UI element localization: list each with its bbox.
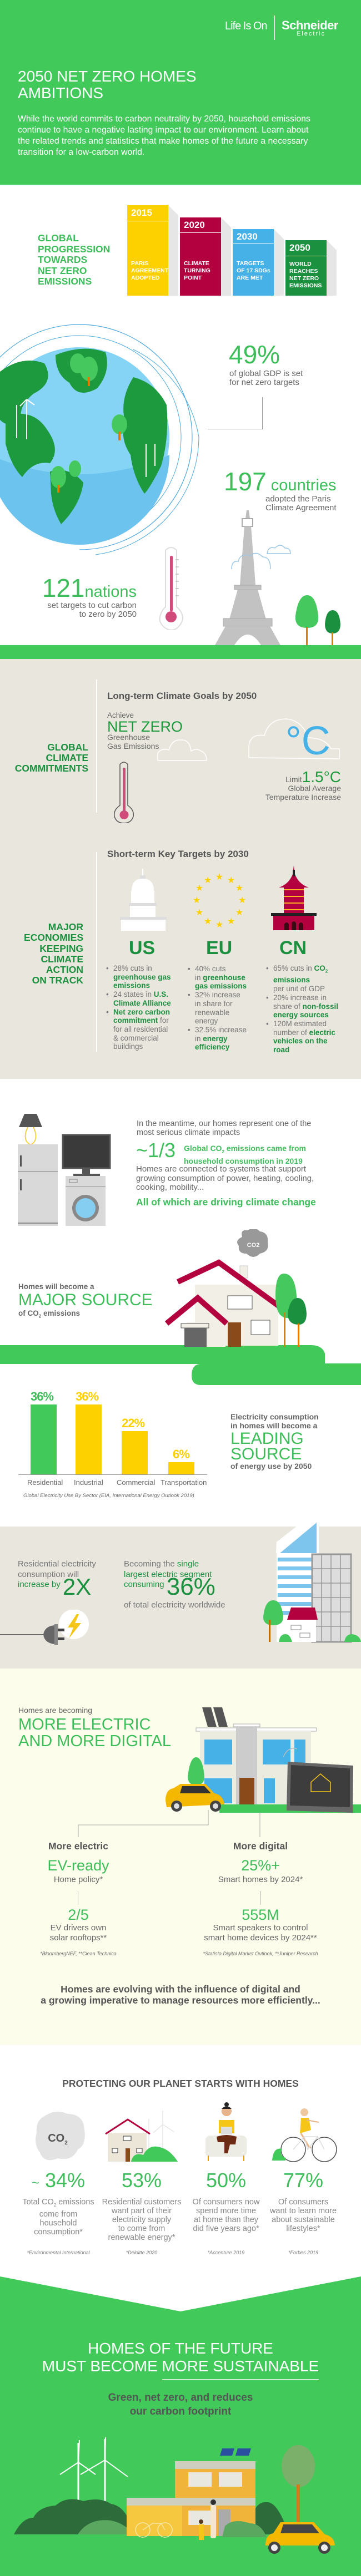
bar 2020: 2020 [184,220,205,230]
stats row: planet: *Deloitte 2020 [126,2250,157,2255]
column: more electric: solar rooftops** [50,1933,107,1943]
text: increase by 2X: consumption will [18,1570,79,1579]
heading: homes of the future: MUST BECOME MORE SUSTAINABLE [42,2357,319,2375]
text: 36% of electricity: largest electric segment [124,1570,212,1579]
icon: eu stars: ★ [235,884,243,893]
stats row: planet: *Accenture 2019 [208,2250,244,2255]
heading: major economies: CLIMATE [41,954,83,965]
bar chart: electricity use by sector: Transportation [161,1478,207,1487]
bullets: EU: in greenhouse [195,973,245,982]
bullets: EU [188,965,247,1051]
column: more electric: EV drivers own [51,1923,106,1933]
stats row: planet: ~ 34% [32,2169,85,2192]
icon: woman on sofa [204,2102,249,2163]
icon: eu stars: ★ [238,896,246,905]
heading: homes of the future: HOMES OF THE FUTURE [88,2340,273,2357]
panel: global climate commitments: • [188,1026,190,1034]
bar 2030 [233,229,274,296]
icon: house with co2 [164,1229,307,1347]
icon: eu stars: ★ [227,917,235,926]
icon: co2 cloud [33,2111,87,2166]
intro paragraph: While the world commits to carbon neutrality by 2050, household emissions [18,114,310,124]
panel: global climate commitments: • [106,990,109,998]
bar 2030: TARGETS [237,260,264,267]
bar 2050: REACHES [289,268,318,275]
logo: Electric [297,31,325,37]
text block: homes climate impact: Global CO2 emissions came from [184,1144,306,1154]
label: EU: EU [206,937,232,959]
stats row: planet: household [40,2219,77,2228]
column: more digital: *Statista Digital Market Outlook, **Juniper Research [203,1951,318,1956]
text: leading source: SOURCE [230,1445,302,1463]
bar 2030: OF 17 SDGs [237,267,270,274]
stat: 49% [229,340,303,387]
text: 36% of electricity: Becoming the single [124,1559,199,1569]
bullets: US: 28% cuts in [113,964,152,972]
column: more digital: More digital [233,1840,288,1852]
text: net zero: NET ZERO [107,718,183,735]
icon: eu stars [193,873,246,930]
intro paragraph: the related trends and statistics that make homes of the future a necessary [18,136,308,146]
icon: thermometer [159,547,183,630]
heading: major economies: KEEPING [39,943,83,954]
icon: eu stars: ★ [195,884,203,893]
stats row: planet: want to learn more [270,2207,337,2215]
text: limit 1.5°C: Limit1.5°C [285,768,341,785]
bar chart: electricity use by sector: Commercial [117,1478,155,1487]
icon: eu stars: ★ [204,876,212,885]
column: more digital: Smart speakers to control [213,1923,308,1933]
stats row: planet: *Environmental International [27,2250,90,2255]
ground shapes [0,1345,361,1385]
text block: homes climate impact: ~1/3 [136,1139,176,1162]
text block: homes climate impact: household consumption in 2019 [184,1157,303,1165]
bar 2015: AGREEMENT [131,267,168,274]
stat: 197 countries: 197 countries [224,467,336,496]
text: increase by 2X [18,1559,96,1600]
text: limit 1.5°C [265,768,341,802]
stat: 49%: of global GDP is set [229,369,303,378]
bullets: EU: in share for [195,1000,233,1008]
bar 2050: 2050 [289,242,310,253]
stats row: planet: *Forbes 2019 [288,2250,318,2255]
illustration: future home [0,2435,361,2562]
column: more electric: 2/5 [68,1906,89,1923]
bar 2020: POINT [184,275,202,281]
bar 2030: 2030 [237,231,258,242]
icon: thermometer [113,762,134,823]
bar 2020: CLIMATE [184,260,209,267]
icon: eu stars: ★ [215,873,223,882]
bullets: US [106,964,171,1051]
heading: global progression: EMISSIONS [38,276,92,287]
text: major source: of CO2 emissions [18,1309,80,1319]
intro paragraph [18,114,310,157]
icon: house with turbines [104,2111,179,2162]
icon: cyclist [271,2108,338,2163]
bar chart: electricity use by sector: 36% [31,1390,53,1403]
text: major source: Homes will become a [18,1282,94,1291]
text: net zero: Achieve [107,711,134,719]
text block: homes climate impact: All of which are driving climate change [136,1196,316,1208]
text block: homes climate impact: cooking, mobility... [136,1183,204,1192]
bullets: EU: 40% cuts [195,965,226,973]
stats row: planet: come from [39,2210,77,2219]
bar 2050: EMISSIONS [289,282,322,289]
bar 2015: PARIS [131,260,148,267]
icon: eu stars: ★ [215,920,223,930]
bullets: CN: share of non-fossil [273,1002,338,1011]
stats row: planet: to come from [118,2224,165,2233]
bullets: CN: 65% cuts in CO2 [273,964,328,974]
icon: degrees celsius: °C [285,719,330,763]
stat: 121 nations [42,574,137,619]
bar chart: electricity use by sector [18,1390,207,1499]
stats row: planet: Of consumers now [193,2198,259,2207]
heading: global progression: NET ZERO [38,265,87,276]
bar chart: electricity use by sector: Global Electricity Use By Sector (EIA, International Energy Outlook 2019) [23,1493,194,1499]
bullets: US: Net zero carbon [113,1008,170,1016]
bullets: EU: efficiency [195,1043,229,1051]
icon: appliances [18,1114,111,1226]
footer panel: homes of the future [0,2276,361,2576]
text: major source [18,1282,153,1319]
bullets: EU: energy [195,1017,218,1025]
icon: eu stars: ★ [235,908,243,917]
heading: global progression: PROGRESSION [38,243,110,254]
heading: global climate commitments: CLIMATE [46,752,88,763]
stat: 197 countries: Climate Agreement [265,503,337,513]
bullets: CN [266,964,338,1054]
stat: 197 countries [224,467,337,513]
bullets: EU: 32% increase [195,991,240,999]
bar 2015: ADOPTED [131,275,159,281]
column: more electric [17,1840,139,1959]
column: more electric: *BloombergNEF, **Clean Technica [40,1951,117,1956]
bullets: US: Climate Alliance [113,999,171,1007]
stats row: planet: consumption* [34,2228,83,2237]
bullets: US: 24 states in U.S. [113,990,168,998]
heading: global progression: GLOBAL [38,232,79,244]
heading: major economies: MAJOR [48,921,83,932]
text: limit 1.5°C: Global Average [288,784,341,793]
logo: Life Is On [225,20,267,32]
bullets: US: for all residential [113,1025,168,1033]
text: homes evolving: a growing imperative to manage resources more efficiently... [41,1995,320,2006]
header panel [0,0,361,185]
icon: plug [0,1610,89,1645]
text: net zero: Greenhouse [107,733,150,742]
icon: house with co2: CO2 [247,1242,259,1249]
text: major source: MAJOR SOURCE [18,1291,153,1309]
bar 2050: NET ZERO [289,275,319,282]
stats row: planet: Of consumers [278,2198,328,2207]
heading: global progression: TOWARDS [38,254,87,265]
text block: homes climate impact: growing consumption of power, heating, cooling, [136,1174,314,1183]
text: homes evolving [0,1984,361,2006]
panel: global climate commitments: • [266,964,269,972]
stats row: planet: about sustainable [272,2215,335,2224]
bar 2015 [127,205,168,296]
bar 2020 [180,217,221,296]
bullets: CN: per unit of GDP [273,985,325,993]
icon: eiffel tower [215,510,280,645]
stat: 121 nations: 121nations [42,574,137,602]
stat: 197 countries: adopted the Paris [265,494,331,504]
panel: global climate commitments: • [266,1020,269,1028]
icon: eu stars: ★ [204,917,212,926]
stat: 49%: 49% [229,340,280,369]
heading: global progression [38,232,110,287]
icon: clouds [231,545,291,569]
logo [225,16,338,40]
column: more digital: 555M [242,1906,279,1923]
bullets: US: commitment for [113,1016,169,1025]
column: more electric: More electric [48,1840,108,1852]
subheading: green net zero: Green, net zero, and reduces [108,2392,253,2403]
icon: cloud outline [157,739,207,761]
bar 2050: WORLD [289,261,312,267]
heading: homes of the future [0,2340,361,2375]
bar 2015: 2015 [131,207,152,218]
stats row: planet: Total CO2 emissions [22,2198,94,2208]
icon: eu stars: ★ [227,876,235,885]
stats row: planet: 50% [206,2169,246,2192]
text block: homes climate impact: most serious climate impacts [137,1128,240,1137]
heading: global climate commitments [15,742,88,774]
text: leading source: LEADING [230,1429,304,1448]
bullets: CN: vehicles on the [273,1037,328,1045]
panel: global climate commitments: • [266,993,269,1002]
text: leading source: in homes will become a [230,1421,317,1430]
bullets: CN: emissions [273,976,310,984]
bar chart: electricity use by sector: 36% [76,1390,98,1403]
bullets: EU: 32.5% increase [195,1026,247,1034]
stats row: planet: Residential customers [102,2198,181,2207]
bar chart: electricity use by sector: 22% [122,1416,144,1430]
text: increase by 2X: Residential electricity [18,1559,96,1569]
label: CN: CN [279,937,307,959]
text: increase by 2X: increase by 2X [18,1574,91,1600]
heading: more electric more digital: MORE ELECTRIC [18,1716,151,1733]
text: leading source [230,1412,319,1470]
bar chart: electricity use by sector: Residential [27,1478,63,1487]
text: leading source: of energy use by 2050 [230,1462,312,1470]
label: US: US [129,937,155,959]
column: more digital: smart home devices by 2024** [204,1933,317,1943]
subheading: long-term goals: Long-term Climate Goals by 2050 [107,691,257,701]
globe illustration [0,324,199,555]
bar 2030: ARE MET [237,275,263,281]
stats row: planet: did five years ago* [193,2224,259,2233]
connectors [78,1810,260,1837]
stat: 121 nations: to zero by 2050 [79,610,137,619]
stats row: planet: at home than they [194,2215,258,2224]
text: homes evolving: Homes are evolving with the influence of digital and [61,1984,300,1995]
bullets: CN: number of electric [273,1028,335,1037]
stats row: planet: renewable energy* [108,2233,175,2242]
heading: global climate commitments: GLOBAL [47,742,88,753]
bullets: CN: 120M estimated [273,1020,327,1028]
subheading: green net zero [0,2391,361,2418]
title: 2050 NET ZERO HOMES [18,68,197,85]
bullets: EU: renewable [195,1008,229,1017]
heading: major economies: ECONOMIES [24,932,83,943]
icon: eu stars: ★ [193,896,200,905]
stats row: planet: want part of their [112,2207,172,2215]
icon: degrees celsius [248,718,340,763]
heading: major economies: ON TRACK [32,975,83,986]
column: more digital [188,1840,333,1959]
panel: more electric and more digital [0,1669,361,2045]
text block: homes climate impact [136,1119,316,1208]
bar chart: electricity use by sector: Industrial [74,1478,103,1487]
bullets: EU: gas emissions [195,982,247,990]
stats row: planet: 53% [122,2169,162,2192]
heading: more electric more digital: Homes are becoming [18,1706,92,1715]
bar 2020: TURNING [184,267,210,274]
text: limit 1.5°C: Temperature Increase [265,793,341,802]
intro paragraph: continue to have a negative lasting impact to our environment. Learn about [18,125,308,135]
icon: capitol [120,869,167,931]
stat: 121 nations: set targets to cut carbon [47,601,137,610]
logo: Schneider [282,18,338,32]
bullets: US: & commercial [113,1034,159,1042]
subheading: green net zero: our carbon footprint [130,2406,231,2417]
column: more electric: Home policy* [54,1875,103,1884]
stats row: planet: electricity supply [112,2215,171,2224]
text: 36% of electricity [124,1559,215,1600]
panel: global climate commitments: • [188,991,190,999]
title [18,68,197,102]
bar 2050 [285,240,327,296]
bullets: US: buildings [113,1042,143,1051]
title: AMBITIONS [18,84,103,102]
heading: more electric more digital: AND MORE DIGITAL [18,1732,171,1750]
panel: global climate commitments: • [106,1008,109,1016]
panel: residential electricity [0,1527,361,1669]
stats row: planet: lifestyles* [286,2224,320,2233]
text block: homes climate impact: In the meantime, our homes represent one of the [137,1119,311,1128]
stats row: planet: 77% [283,2169,323,2192]
stat: 49%: for net zero targets [229,378,299,387]
bullets: US: greenhouse gas [113,973,171,981]
panel: global climate commitments [0,659,361,1079]
heading: major economies: ACTION [46,964,83,975]
column: more digital: 25%+ [241,1857,280,1874]
bullets: US: emissions [113,981,150,990]
text: net zero [107,711,183,751]
column: more electric: EV-ready [47,1857,109,1874]
bullets: CN: road [273,1046,289,1054]
bar chart: electricity use by sector: 6% [173,1447,189,1461]
subheading: short-term targets: Short-term Key Targets by 2030 [107,849,249,859]
icon: building and house [263,1523,361,1643]
text block: homes climate impact: Homes are connected to systems that support [136,1164,306,1174]
icon: co2 cloud: CO [48,2132,64,2144]
panel: residential electricity: of total electricity worldwide [124,1600,225,1610]
ground strip [0,645,361,659]
panel: global climate commitments: • [106,964,109,972]
heading: more electric more digital [18,1706,171,1750]
timeline chart [127,205,337,296]
heading: global climate commitments: COMMITMENTS [15,763,88,774]
text: net zero: Gas Emissions [107,742,159,751]
panel: global climate commitments: • [188,965,190,973]
icon: smart house with car and tablet [166,1707,361,1813]
stats row: planet: spend more time [196,2207,256,2215]
bullets: CN: 20% increase in [273,993,327,1002]
intro paragraph: transition for a low-carbon world. [18,148,144,157]
bullets: CN: energy sources [273,1011,329,1019]
icon: trees [295,595,340,645]
icon: eu stars: ★ [195,908,203,917]
bullets: EU: in energy [195,1035,228,1043]
heading: major economies [24,921,83,986]
text: 36% of electricity: consuming 36% [124,1573,215,1600]
icon: co2 cloud: 2 [64,2140,68,2146]
text: leading source: Electricity consumption [230,1412,319,1421]
heading: protecting our planet: PROTECTING OUR PLANET STARTS WITH HOMES [62,2078,299,2089]
icon: pagoda [271,865,317,930]
column: more digital: Smart homes by 2024* [218,1875,303,1884]
stats row: planet [0,2169,361,2263]
